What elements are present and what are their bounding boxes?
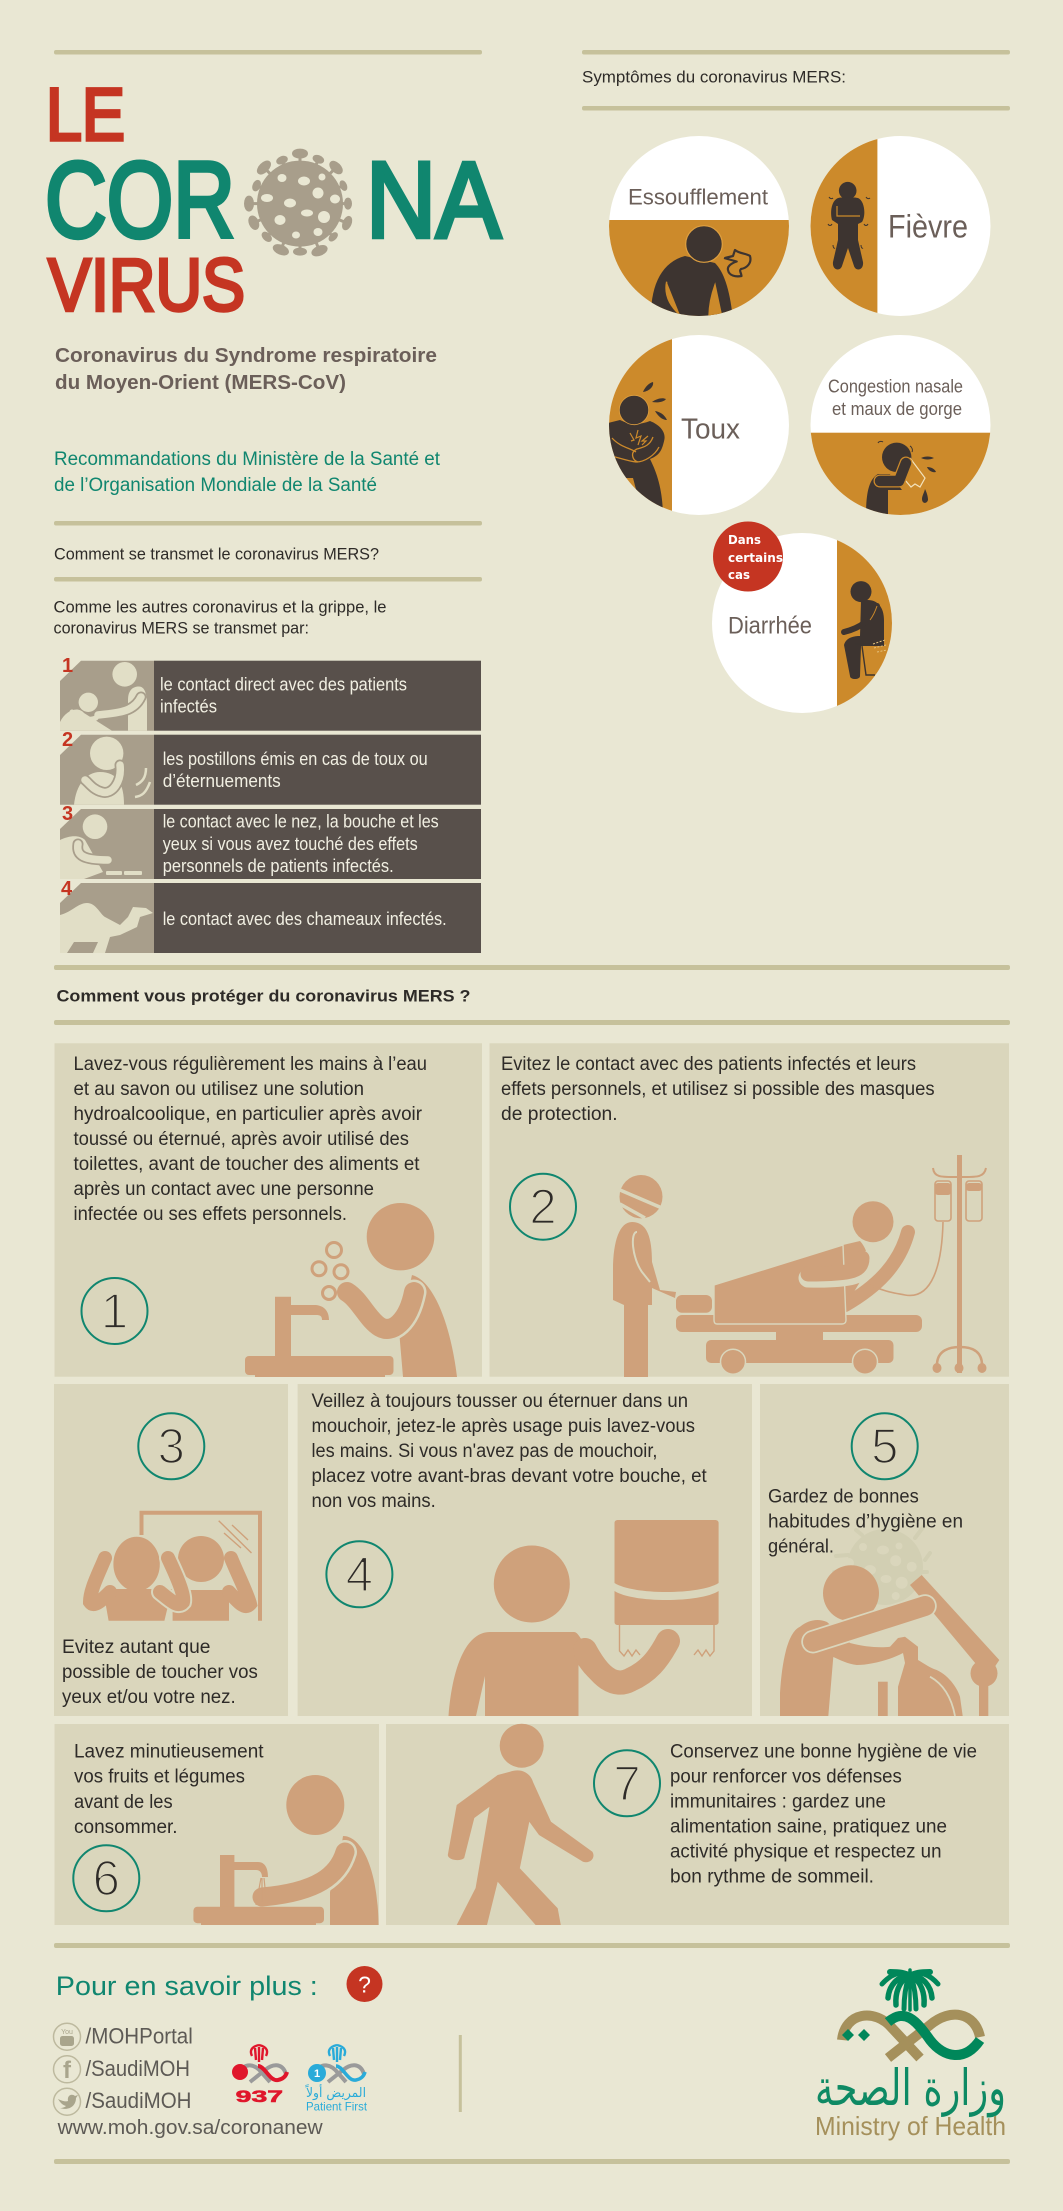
title (45, 73, 501, 326)
symptom: Fievre: Fièvre (888, 209, 968, 245)
panel: transmission row 3: personnels de patients infectés. (163, 856, 394, 876)
panel: transmission row 1: 1 (62, 655, 73, 677)
number 4 (326, 1541, 392, 1607)
step 1 text: après un contact avec une personne (74, 1179, 374, 1200)
recommendations text (54, 449, 441, 496)
number 7 (594, 1750, 660, 1816)
number 2: 2 (529, 1180, 557, 1234)
number 4: 4 (346, 1548, 373, 1602)
step 1 text: toussé ou éternué, après avoir utilisé des (74, 1129, 409, 1150)
transmission intro: Comme les autres coronavirus et la grippe, le (54, 599, 386, 617)
step 5 text (768, 1487, 963, 1558)
symptom: Congestion nasale: Congestion nasale (828, 376, 963, 396)
step 5 text: habitudes d’hygiène en (768, 1512, 963, 1533)
logo: patient first: Patient First (306, 2100, 368, 2114)
symptom: Toux (600, 330, 789, 520)
icon: hand washing (245, 1203, 457, 1377)
recommendations text: de l’Organisation Mondiale de la Santé (54, 475, 377, 496)
step 7 text: Conservez une bonne hygiène de vie (670, 1741, 977, 1762)
subtitle (55, 345, 437, 394)
heading: learn more: Pour en savoir plus : (56, 1971, 318, 2001)
panel: transmission row 2 (60, 729, 481, 805)
step 7 text (670, 1741, 977, 1888)
step 1 text: toilettes, avant de toucher des aliments et (74, 1154, 420, 1175)
heading: protection: Comment vous protéger du coronavirus MERS ? (56, 987, 470, 1006)
step 7 text: pour renforcer vos défenses (670, 1767, 902, 1788)
callout: dans certains cas: Dans (728, 533, 761, 547)
logo: ministry of health: Ministry of Health (815, 2111, 1006, 2141)
icon: washing vegetables (193, 1775, 378, 1925)
symptom: Diarrhee (712, 530, 897, 720)
social links: /SaudiMOH (86, 2056, 190, 2081)
step 3 text (62, 1637, 258, 1708)
transmission intro: coronavirus MERS se transmet par: (54, 620, 309, 638)
title: NA (366, 140, 501, 260)
social links (54, 2023, 193, 2115)
step 5 text: général. (768, 1537, 834, 1558)
number 3: 3 (158, 1420, 185, 1474)
panel: step 4 (298, 1384, 752, 1716)
number 5: 5 (871, 1420, 898, 1474)
symptom: Fievre (810, 136, 990, 316)
callout: dans certains cas: cas (728, 568, 750, 582)
panel: transmission row 3 (60, 803, 481, 879)
panel: transmission row 1: le contact direct avec des patients (160, 675, 407, 695)
step 6 text (74, 1741, 264, 1838)
icon: palm (882, 1970, 938, 2010)
panel: transmission row 1 (60, 655, 481, 731)
step 7 text: activité physique et respectez un (670, 1842, 942, 1863)
step 4 text: Veillez à toujours tousser ou éternuer dans un (312, 1391, 688, 1412)
step 4 text: les mains. Si vous n'avez pas de mouchoir, (312, 1441, 657, 1462)
panel: step 6 (54, 1724, 379, 1925)
recommendations text: Recommandations du Ministère de la Santé et (54, 449, 441, 470)
logo: patient first (305, 2045, 368, 2114)
transmission intro (54, 599, 386, 638)
step 4 text: mouchoir, jetez-le après usage puis lavez-vous (312, 1416, 695, 1437)
heading: symptoms: Symptômes du coronavirus MERS: (582, 69, 846, 87)
step 2 text: effets personnels, et utilisez si possible des masques (501, 1079, 935, 1100)
icon: question mark (346, 1966, 382, 2002)
logo: patient first: 1 (314, 2068, 320, 2080)
logo: patient first: المريض أولاً (305, 2084, 366, 2101)
icon: question mark: ? (358, 1972, 371, 1998)
step 4 text: placez votre avant-bras devant votre bouche, et (312, 1466, 707, 1487)
callout: dans certains cas: certains (728, 551, 783, 565)
step 1 text: Lavez-vous régulièrement les mains à l’eau (74, 1054, 427, 1075)
panel: transmission row 3: le contact avec le nez, la bouche et les (163, 812, 439, 832)
icon: faint virus (834, 1525, 930, 1605)
icon: towel dispenser and person (448, 1520, 719, 1716)
panel: transmission row 4: 4 (61, 878, 73, 900)
icon: walking person (448, 1724, 593, 1925)
panel: transmission row 2: 2 (62, 729, 73, 751)
panel: transmission row 3: 3 (62, 803, 73, 825)
step 6 text: avant de les (74, 1792, 173, 1813)
symptom: Toux: Toux (681, 414, 740, 446)
panel: step 2 (490, 1043, 1009, 1377)
panel: step 5 (760, 1384, 1009, 1716)
panel: step 3 (54, 1384, 288, 1716)
step 4 text (312, 1391, 707, 1512)
subtitle: Coronavirus du Syndrome respiratoire (55, 345, 437, 367)
step 1 text: et au savon ou utilisez une solution (74, 1079, 364, 1100)
step 7 text: immunitaires : gardez une (670, 1792, 886, 1813)
number 1 (82, 1278, 148, 1344)
icon: cleaning person (780, 1565, 999, 1716)
panel: step 7 (386, 1724, 1009, 1925)
panel: transmission row 3: yeux si vous avez touché des effets (163, 834, 418, 854)
symptom: Essoufflement (609, 136, 789, 320)
number 1: 1 (101, 1285, 128, 1339)
step 4 text: non vos mains. (312, 1491, 436, 1512)
social links: /SaudiMOH (86, 2088, 192, 2113)
social links: /MOHPortal (86, 2023, 193, 2048)
step 2 text: Evitez le contact avec des patients infectés et leurs (501, 1054, 916, 1075)
panel: transmission row 4: le contact avec des chameaux infectés. (163, 909, 447, 929)
number 2 (510, 1174, 576, 1240)
panel: transmission row 2: d’éternuements (163, 771, 281, 791)
panel: transmission row 1: infectés (160, 697, 217, 717)
title: COR (45, 140, 235, 260)
icon: mirror and face touching (90, 1513, 260, 1621)
step 6 text: consommer. (74, 1817, 178, 1838)
panel: transmission row 4 (60, 878, 481, 953)
callout: dans certains cas (713, 522, 783, 592)
logo: 937 (232, 2045, 287, 2106)
step 2 text: de protection. (501, 1104, 618, 1125)
icon: virus (246, 150, 352, 257)
step 6 text: Lavez minutieusement (74, 1741, 264, 1762)
step 3 text: Evitez autant que (62, 1637, 210, 1658)
social links: You (61, 2029, 73, 2036)
number 6 (73, 1845, 139, 1911)
step 3 text: yeux et/ou votre nez. (62, 1687, 236, 1708)
step 1 text: hydroalcoolique, en particulier après avoir (74, 1104, 423, 1125)
step 1 text (74, 1054, 427, 1225)
step 2 text (501, 1054, 935, 1125)
social links: f (63, 2057, 72, 2084)
title: LE (46, 73, 125, 156)
panel: step 1 (54, 1043, 482, 1377)
number 7: 7 (613, 1757, 641, 1811)
icon: doctor and patient (613, 1155, 986, 1377)
number 6: 6 (93, 1852, 120, 1906)
logo: ministry of health (815, 1970, 1006, 2141)
title: VIRUS (48, 243, 245, 326)
heading: transmission: Comment se transmet le coronavirus MERS? (54, 546, 379, 564)
step 1 text: infectée ou ses effets personnels. (74, 1204, 347, 1225)
step 3 text: possible de toucher vos (62, 1662, 258, 1683)
step 5 text: Gardez de bonnes (768, 1487, 919, 1508)
symptom: Essoufflement: Essoufflement (628, 184, 768, 210)
logo: 937: 937 (236, 2087, 283, 2106)
step 7 text: alimentation saine, pratiquez une (670, 1817, 947, 1838)
subtitle: du Moyen-Orient (MERS-CoV) (55, 372, 346, 394)
symptom: Diarrhee: Diarrhée (728, 613, 812, 640)
website url: www.moh.gov.sa/coronanew (57, 2117, 323, 2139)
step 7 text: bon rythme de sommeil. (670, 1867, 874, 1888)
symptom: Congestion nasale: et maux de gorge (832, 399, 962, 419)
number 5 (852, 1413, 918, 1479)
step 6 text: vos fruits et légumes (74, 1767, 245, 1788)
number 3 (138, 1413, 204, 1479)
symptom: Congestion nasale (810, 335, 991, 518)
panel: transmission row 2: les postillons émis en cas de toux ou (163, 749, 428, 769)
